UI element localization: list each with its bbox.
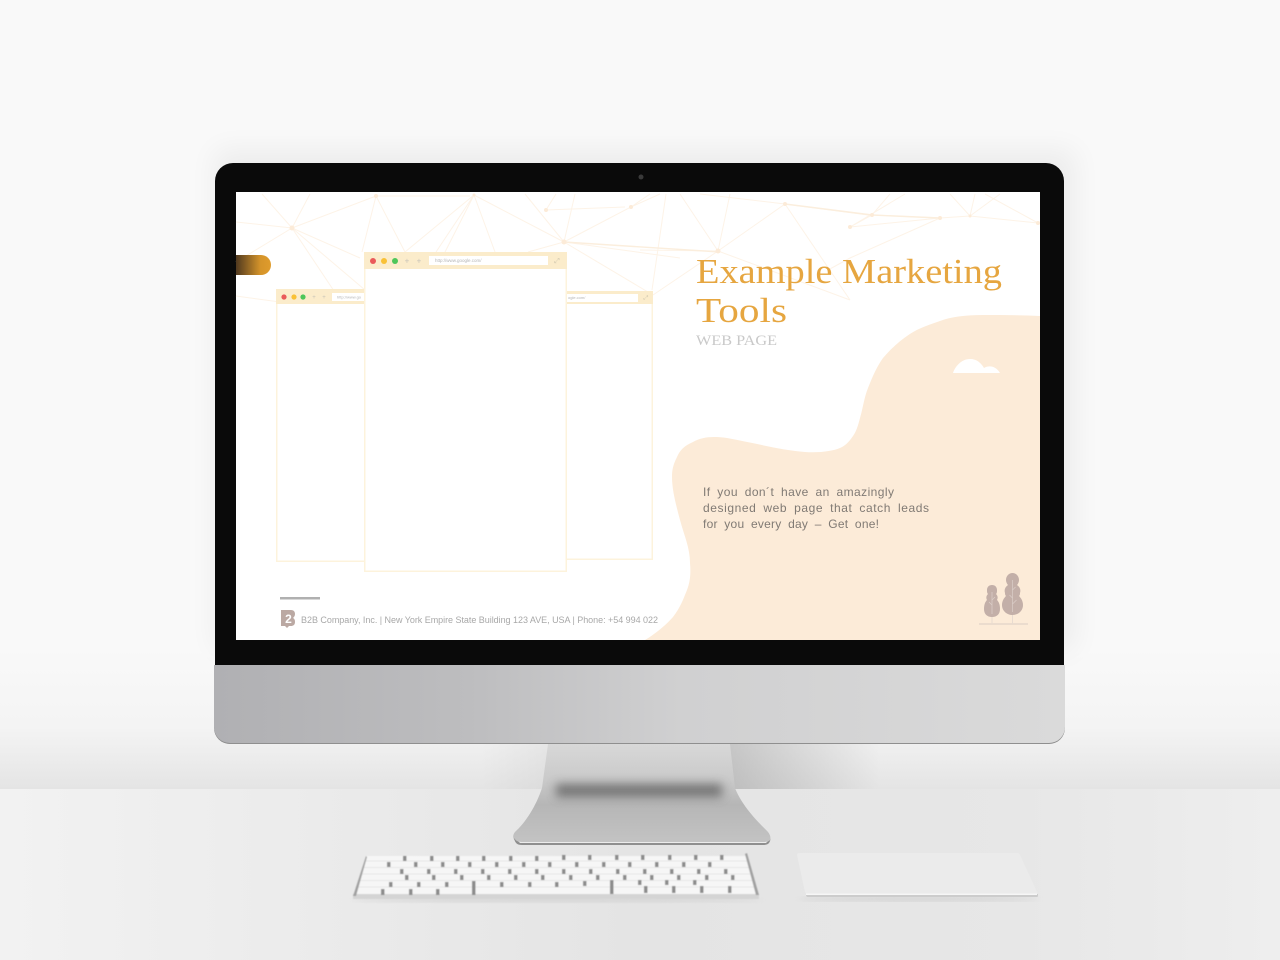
body text: for you every day – Get one! [703, 517, 879, 531]
icon: trees [979, 573, 1028, 624]
title: Example Marketing [696, 252, 1002, 291]
keyboard [351, 853, 761, 902]
browser window: center: + [405, 256, 410, 266]
desk surface [0, 789, 1280, 960]
subtitle: WEB PAGE [696, 333, 777, 349]
network nodes [290, 194, 1040, 254]
screen [236, 192, 1040, 640]
body text [703, 485, 929, 531]
browser window: center: + [417, 256, 422, 266]
monitor stand [513, 744, 771, 845]
browser window: left: + [322, 295, 326, 301]
browser window: center: http://www.google.com/ [435, 258, 482, 263]
browser window: right [560, 291, 653, 559]
shadow on wall left of stand [480, 744, 548, 789]
peach blob [645, 315, 1040, 640]
keyboard key gaps [381, 855, 734, 895]
icon: company logo [281, 610, 295, 628]
browser window: left: + [312, 295, 316, 301]
trackpad [797, 853, 1038, 902]
browser window: right: ogle.com/ [568, 295, 586, 300]
slide background [236, 192, 1040, 640]
network pattern [236, 194, 1038, 302]
title: Tools [696, 291, 787, 330]
footer text: B2B Company, Inc. | New York Empire State Building 123 AVE, USA | Phone: +54 994 022 [301, 615, 658, 625]
soft shadow behind monitor [215, 150, 1075, 650]
footer rule [280, 597, 320, 600]
keyboard row lines [355, 861, 757, 887]
bottom edge of chin [214, 727, 1065, 744]
browser window: left [276, 289, 369, 561]
decorative gradient pill [236, 255, 271, 275]
browser window: right: ⤢ [644, 294, 649, 302]
body text: If you don´t have an amazingly [703, 485, 894, 499]
monitor [214, 163, 1065, 744]
icon: cloud [953, 359, 1000, 373]
browser window: left: http://www.go [337, 294, 362, 300]
monitor bezel [215, 163, 1064, 666]
shadow on wall right of stand [730, 744, 880, 789]
icon: company logo: 2 [285, 612, 292, 626]
title [696, 252, 1002, 330]
monitor chin [214, 665, 1065, 744]
camera [638, 174, 644, 180]
body text: designed web page that catch leads [703, 501, 929, 515]
browser window: center [364, 252, 567, 571]
browser window: center: ⤢ [554, 257, 560, 265]
